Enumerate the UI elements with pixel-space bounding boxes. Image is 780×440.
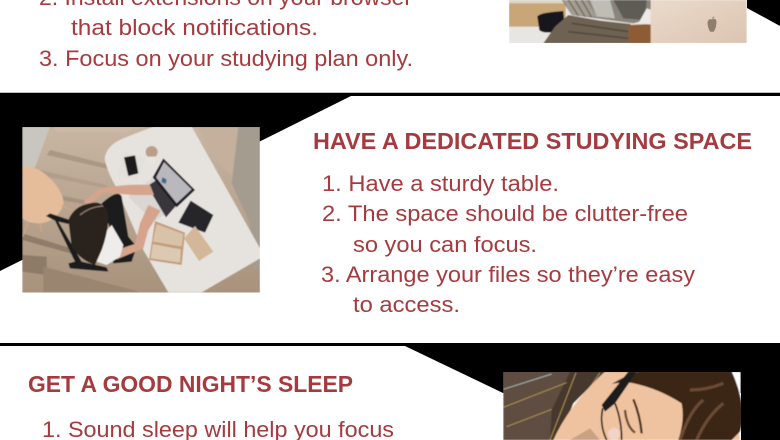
text: space tips: to access. [353,292,460,317]
text: space tips: 2. The space should be clutter-free [322,201,688,226]
photo: person at laptop [509,0,747,43]
text: space tips [321,171,695,317]
heading: have a dedicated studying space: HAVE A DEDICATED STUDYING SPACE [313,128,752,154]
panel: have a dedicated studying space [22,127,752,317]
text: space tips: so you can focus. [353,232,537,257]
panel: black band behind good night's sleep [0,343,780,440]
heading: get a good night's sleep: GET A GOOD NIGHT’S SLEEP [28,371,353,397]
photo: man sleeping with glasses [503,372,742,440]
text: space tips: 1. Have a sturdy table. [322,171,559,196]
text: space tips: 3. Arrange your files so they’re easy [321,262,695,287]
icon: apple logo on laptop [708,16,716,32]
text: distraction tips: that block notifications. [71,15,318,40]
text: distraction tips: 3. Focus on your studying plan only. [39,46,413,71]
panel: get a good night's sleep [28,371,742,440]
divider: gray rule under top panel [0,92,780,93]
panel: black band behind dedicated studying space [0,93,780,271]
photo: woman working at white table from above [22,127,260,293]
text: distraction tips [39,0,413,71]
black corner top right [747,0,780,26]
panel: block distractions (top) [39,0,747,71]
